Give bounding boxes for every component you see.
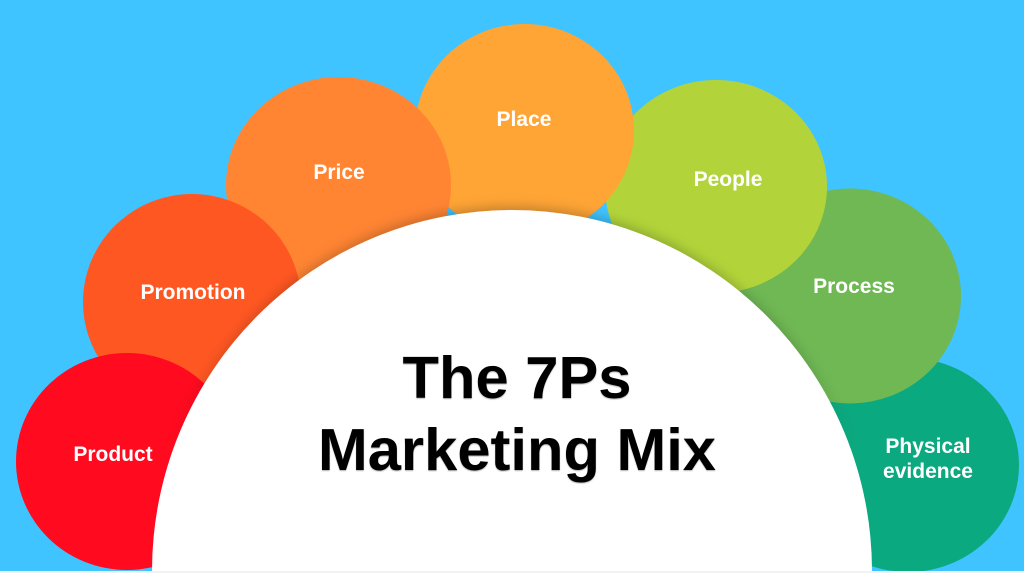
title line 2: Marketing Mix xyxy=(318,416,716,483)
label: Physical evidence: evidence xyxy=(883,460,973,483)
circle: Price xyxy=(226,77,451,293)
circle: Physical evidence xyxy=(797,358,1019,572)
circle: Promotion xyxy=(83,194,301,410)
central white semicircle xyxy=(152,210,872,571)
label: Process: Process xyxy=(813,275,895,298)
circle: Process xyxy=(739,188,961,404)
petal: Promotion xyxy=(83,194,301,410)
label: Physical evidence: Physical xyxy=(885,435,971,458)
circle: Product xyxy=(16,353,238,570)
petal: Product xyxy=(16,353,238,570)
petal: Price xyxy=(226,77,451,293)
title line 1: The 7Ps xyxy=(403,344,631,411)
petal: Place xyxy=(415,24,634,237)
label: People: People xyxy=(694,168,762,191)
shadow of central semicircle xyxy=(152,207,872,568)
label: Product: Product xyxy=(73,443,153,466)
petal: Physical evidence xyxy=(797,358,1019,572)
bottom strip xyxy=(0,571,1024,573)
circle: People xyxy=(605,80,827,293)
circle: Place xyxy=(415,24,634,237)
petal: People xyxy=(605,80,827,293)
label: Promotion: Promotion xyxy=(140,281,246,304)
title xyxy=(318,344,716,483)
label: Price: Price xyxy=(313,161,365,184)
label: Place: Place xyxy=(497,108,551,131)
petal: Process xyxy=(739,188,961,404)
